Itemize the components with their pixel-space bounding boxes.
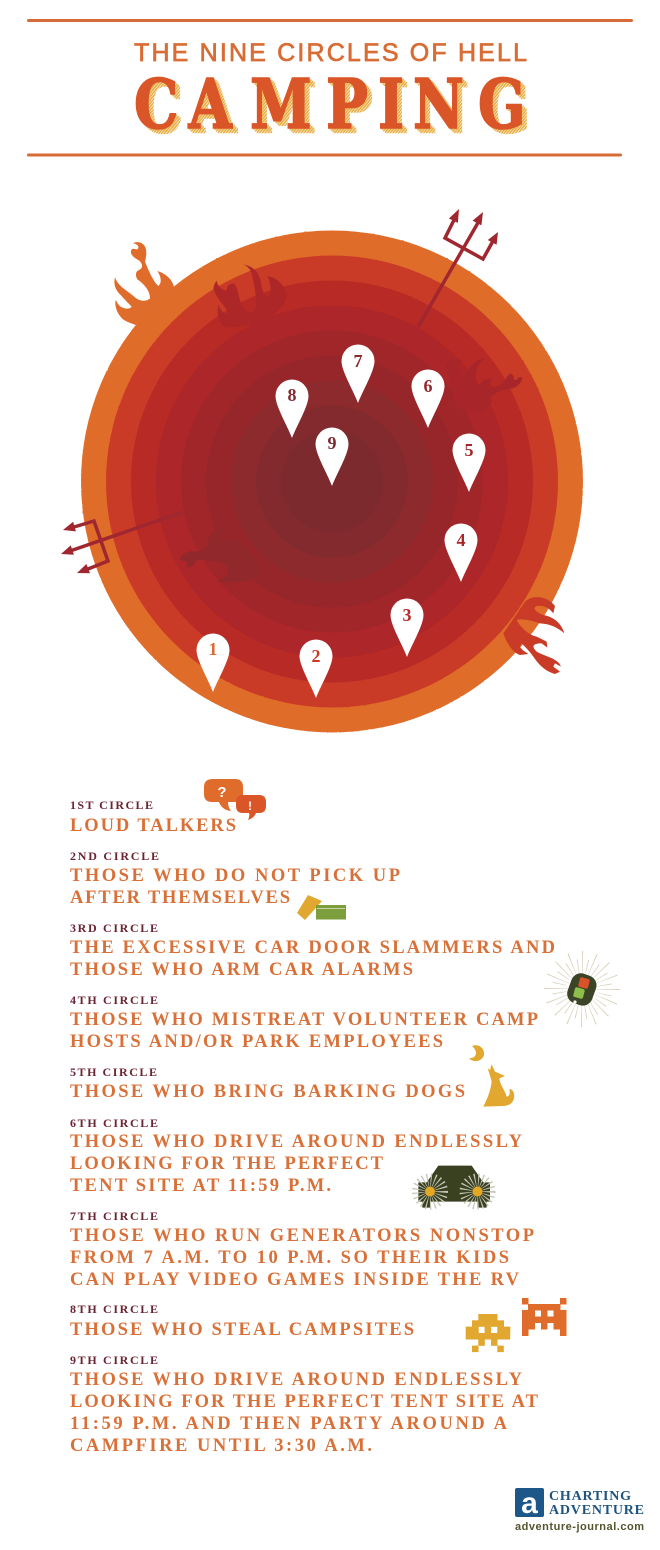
list item: 7th circle <box>70 1209 534 1290</box>
list item: 3rd circle: THE EXCESSIVE CAR DOOR SLAMMERS AND <box>70 938 555 958</box>
icon: litter <box>297 895 346 920</box>
list item: 4th circle: HOSTS AND/OR PARK EMPLOYEES <box>70 1032 443 1052</box>
pin 9 <box>316 428 348 486</box>
pin 3 <box>390 598 424 657</box>
header rule: bottom <box>27 154 622 156</box>
pin 9: 9 <box>328 433 336 453</box>
flame: outer top left <box>114 242 174 325</box>
list item: 7th circle: THOSE WHO RUN GENERATORS NONSTOP <box>70 1226 534 1246</box>
pin 6 <box>412 370 444 428</box>
pin 5 <box>452 434 486 492</box>
flame: dark top <box>213 264 287 328</box>
concentric rings <box>81 230 583 732</box>
heading: camping: CAMPING <box>137 68 529 147</box>
icon: car alarm fob <box>556 963 608 1015</box>
pin 6: 6 <box>424 376 432 396</box>
heading: camping: CAMPING <box>136 66 527 146</box>
pin 3: 3 <box>402 605 412 625</box>
list item: 2nd circle: THOSE WHO DO NOT PICK UP <box>70 866 400 886</box>
list item: 6th circle: LOOKING FOR THE PERFECT <box>70 1154 384 1174</box>
list item: 2nd circle <box>70 849 400 908</box>
list item: 5th circle: THOSE WHO BRING BARKING DOGS <box>70 1082 465 1102</box>
list item: 1st circle: 1ST CIRCLE <box>70 798 153 812</box>
icon: yellow space invader <box>466 1314 510 1352</box>
list item: 1st circle: LOUD TALKERS <box>70 816 236 836</box>
pin 1 <box>196 634 230 692</box>
pin 2 <box>300 640 332 698</box>
list item: 2nd circle: 2ND CIRCLE <box>70 849 159 863</box>
trident: left <box>61 512 183 573</box>
icon: moon and howling dog <box>469 1045 514 1107</box>
logo: charting adventure: CHARTING <box>549 1489 631 1504</box>
icon: speech bubbles: ! <box>248 799 252 813</box>
heading: camping: CAMPING <box>139 69 531 149</box>
pin 8 <box>276 380 308 438</box>
chart: nine concentric circles of hell <box>61 209 583 732</box>
list item: 8th circle: 8TH CIRCLE <box>70 1302 158 1316</box>
list item: 7th circle: FROM 7 A.M. TO 10 P.M. SO THEIR KIDS <box>70 1248 509 1268</box>
list item: 9th circle: LOOKING FOR THE PERFECT TENT SITE AT <box>70 1392 539 1412</box>
flame: dark lower left <box>180 527 259 582</box>
icon: speech bubbles <box>204 779 266 820</box>
list item: 6th circle: TENT SITE AT 11:59 P.M. <box>70 1176 331 1196</box>
flame: claw lower right <box>503 597 564 674</box>
pin 1: 1 <box>208 639 218 659</box>
list item: 6th circle: 6TH CIRCLE <box>70 1116 158 1130</box>
heading: camping: CAMPING <box>134 65 526 144</box>
list item: 4th circle: 4TH CIRCLE <box>70 993 158 1007</box>
logo: charting adventure: adventure-journal.com <box>515 1521 644 1533</box>
list item: 6th circle <box>70 1116 523 1196</box>
list item: 4th circle <box>70 993 538 1052</box>
list item: 5th circle: 5TH CIRCLE <box>70 1065 157 1079</box>
list item: 8th circle <box>70 1302 414 1340</box>
pin 5: 5 <box>464 440 474 460</box>
list item: 9th circle: 9TH CIRCLE <box>70 1353 158 1367</box>
list item: 1st circle <box>70 798 236 836</box>
flame: dark right <box>445 358 522 412</box>
list item: 7th circle: CAN PLAY VIDEO GAMES INSIDE THE RV <box>70 1270 520 1290</box>
pin 4 <box>444 524 478 582</box>
logo: charting adventure: a <box>521 1487 538 1520</box>
list item: 3rd circle <box>70 921 555 980</box>
icon: car with headlights <box>418 1166 490 1208</box>
trident: top right <box>418 209 498 327</box>
list item: 2nd circle: AFTER THEMSELVES <box>70 888 290 908</box>
list item: 9th circle: THOSE WHO DRIVE AROUND ENDLESSLY <box>70 1370 523 1390</box>
pin 4: 4 <box>456 530 466 550</box>
logo: charting adventure: ADVENTURE <box>549 1503 644 1518</box>
list item: 3rd circle: 3RD CIRCLE <box>70 921 158 935</box>
icon: speech bubbles: ? <box>217 784 227 801</box>
pin 2: 2 <box>312 646 320 666</box>
list item: 8th circle: THOSE WHO STEAL CAMPSITES <box>70 1320 414 1340</box>
list item: 9th circle <box>70 1353 539 1456</box>
pin 8: 8 <box>288 385 296 405</box>
logo: charting adventure <box>515 1487 644 1533</box>
list item: 9th circle: CAMPFIRE UNTIL 3:30 A.M. <box>70 1436 372 1456</box>
header rule: top <box>27 19 633 22</box>
list item: 4th circle: THOSE WHO MISTREAT VOLUNTEER CAMP <box>70 1010 538 1030</box>
icon: orange space invader <box>522 1298 566 1336</box>
heading: the nine circles of hell: THE NINE CIRCLES OF HELL <box>134 39 527 67</box>
list item: 7th circle: 7TH CIRCLE <box>70 1209 158 1223</box>
pin 7: 7 <box>354 351 362 371</box>
list item: 3rd circle: THOSE WHO ARM CAR ALARMS <box>70 960 413 980</box>
title block <box>134 39 531 149</box>
list item: 9th circle: 11:59 P.M. AND THEN PARTY AROUND A <box>70 1414 508 1434</box>
list item: 6th circle: THOSE WHO DRIVE AROUND ENDLESSLY <box>70 1132 523 1152</box>
pin 7 <box>342 344 374 403</box>
list item: 5th circle <box>70 1065 465 1102</box>
